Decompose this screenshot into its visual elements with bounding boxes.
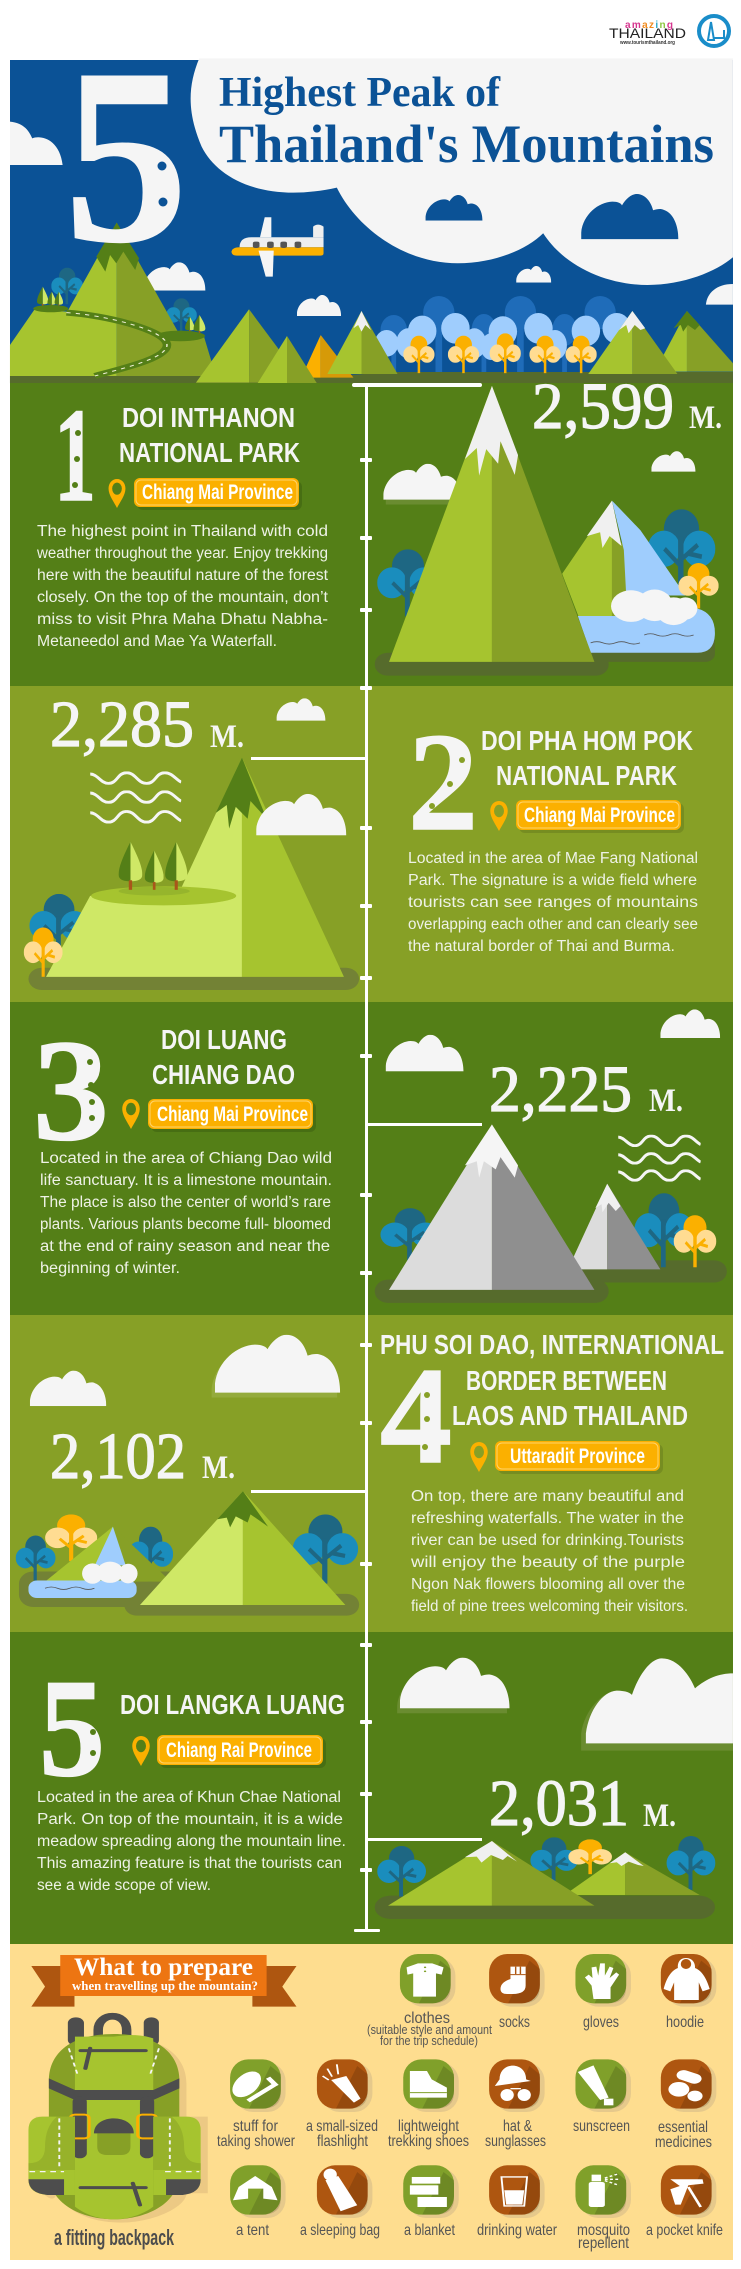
small mountain with waterfall [28,1527,171,1598]
big number 2: 2 [408,705,478,860]
description [36,523,329,650]
item labels: trekking shoes [388,2133,469,2150]
section 1 background [10,383,733,686]
height label: M. [689,400,722,436]
big number 1: 1 [54,381,96,529]
description [408,850,698,955]
ribbon title [72,1954,258,1993]
province pill: Chiang Rai Province [166,1739,312,1762]
item labels: (suitable style and amount [367,2022,492,2037]
ground shadow [375,1896,715,1919]
altitude scale line [251,383,482,1932]
mountains: middle range [196,309,398,383]
item labels: hat & [503,2118,532,2135]
icon: socks [489,1954,545,2007]
title: Thailand's Mountains [219,114,714,174]
trees [377,1836,715,1897]
ribbon title: What to prepare [74,1954,253,1981]
description: overlapping each other and can clearly see [408,916,698,933]
trees [380,1193,716,1267]
small grey mountain [568,1184,660,1269]
item labels [217,2010,723,2252]
province pill: Uttaradit Province [510,1445,645,1468]
trees: orange row [403,333,597,373]
illustration: low mountains [375,1658,733,1919]
wind lines [618,1136,701,1180]
hero illustration [10,58,733,383]
big grey mountain [389,1125,594,1290]
icon: clothes [400,1954,455,2007]
left edge cloud [10,122,63,165]
illustration: mountains with waterfall [375,386,719,676]
heading: NATIONAL PARK [496,760,677,791]
small mountain [565,1852,700,1895]
description: Located in the area of Chiang Dao wild [40,1150,332,1167]
wind lines [90,773,181,822]
description: refreshing waterfalls. The water in the [411,1510,684,1527]
heading [152,1024,295,1090]
section 4 background [10,1315,733,1632]
description: Park. The signature is a wide field where [408,872,697,889]
trees [16,1514,358,1584]
description: tourists can see ranges of mountains [408,894,698,911]
heading: NATIONAL PARK [119,437,300,468]
description: field of pine trees welcoming their visitors. [411,1598,688,1615]
description: beginning of winter. [40,1260,180,1277]
province pill [157,1735,326,1768]
mountain: hero left with road [10,223,216,376]
section 5 background [10,1632,733,1944]
logo: Amazing Thailand [609,20,686,46]
item labels: flashlight [317,2133,368,2150]
description: miss to visit Phra Maha Dhatu Nabha- [37,611,328,628]
small white clouds [144,262,733,316]
item labels: sunscreen [573,2118,630,2135]
height label: M. [643,1798,676,1834]
logo: Amazing Thailand: www.tourismthailand.org [619,40,675,46]
province pill [516,800,684,833]
heading [119,402,300,468]
item labels: socks [499,2014,530,2031]
big number 1 [54,381,96,529]
icon: airplane [232,217,324,277]
description: meadow spreading along the mountain line. [37,1833,346,1850]
item labels: medicines [655,2134,712,2151]
item labels: lightweight [398,2118,459,2135]
item labels: taking shower [217,2133,296,2150]
item labels: for the trip schedule) [380,2033,478,2048]
icon: sleeping bag [317,2165,372,2218]
item labels: a tent [236,2222,269,2239]
panel: section 1 Doi Inthanon [10,370,733,686]
panel: what to prepare [10,1944,733,2260]
logo: Amazing Thailand: THAILAND [609,25,686,41]
description: plants. Various plants become full- bloomed [40,1216,331,1233]
height label: 2,102 [50,1420,186,1493]
icon: trekking shoes [403,2059,459,2112]
description: see a wide scope of view. [37,1877,211,1894]
height label: M. [649,1083,683,1119]
ground shadow [375,633,715,676]
blue clouds [426,194,678,239]
hero sky background [10,60,733,383]
section 2 background [10,686,733,1002]
province pill: Chiang Mai Province [157,1103,308,1126]
big number 4: 4 [380,1339,452,1492]
small mountain and waterfall [562,501,719,653]
icon: medicines [661,2059,716,2112]
height label: M. [210,719,244,755]
description: the natural border of Thai and Burma. [408,938,675,955]
small trees [119,842,187,890]
mountain [46,758,344,977]
heading: DOI PHA HOM POK [481,725,693,756]
panel: section 5 Doi Langka Luang [10,1632,733,1944]
heading [481,725,693,791]
item labels: clothes [404,2010,450,2027]
description: The place is also the center of world’s rare [40,1194,331,1211]
heading: CHIANG DAO [152,1059,295,1090]
description: Ngon Nak flowers blooming all over the [411,1576,685,1593]
clouds [383,451,695,505]
description: will enjoy the beauty of the purple [410,1554,685,1571]
icon: soap and toothbrush [226,2059,286,2112]
heading: DOI LANGKA LUANG [120,1689,345,1720]
height label: 2,031 [489,1767,629,1840]
title: Highest Peak of [219,70,501,116]
description: river can be used for drinking.Tourists [411,1532,684,1549]
description: Park. On top of the mountain, it is a wide [37,1811,343,1828]
main mountain [140,1491,345,1605]
item labels: drinking water [477,2222,558,2239]
ribbon banner [31,1955,297,2007]
description: Located in the area of Mae Fang National [408,850,698,867]
trees [377,509,715,616]
province pill: Chiang Mai Province [142,481,293,504]
panel: section 2 Doi Pha Hom Pok [10,686,733,1002]
icon: sunscreen [575,2059,631,2112]
province pill [495,1441,663,1474]
height label: 2,599 [532,370,674,443]
item labels: a small-sized [306,2118,378,2135]
backpack label: a fitting backpack [54,2225,174,2250]
graphics: ribbon, backpack and tiles [28,1954,716,2223]
description: On top, there are many beautiful and [411,1488,684,1505]
heading: BORDER BETWEEN [466,1365,667,1396]
heading: DOI LUANG [161,1024,287,1055]
preparation background [10,1944,733,2260]
item labels: hoodie [666,2014,704,2031]
province pill [134,478,302,510]
main mountain [389,386,594,662]
description: This amazing feature is that the tourists can [37,1855,342,1872]
icon: hoodie [661,1954,716,2007]
item labels: stuff for [233,2118,279,2135]
section 3 background [10,1002,733,1315]
description [37,1789,346,1894]
item labels: mosquito [577,2222,630,2239]
ground strip [10,372,733,383]
description: The highest point in Thailand with cold [37,523,328,540]
icon: tent [230,2165,286,2218]
description: Located in the area of Khun Chae National [37,1789,341,1806]
icon: location pin [122,1099,140,1129]
big white cloud [191,58,733,285]
illustration: mountain with meadow [24,698,359,990]
item labels: a sleeping bag [300,2222,380,2239]
icon: gloves [575,1954,631,2007]
clouds [30,1335,340,1406]
ground shadow [19,1571,359,1616]
description: here with the beautiful nature of the forest [37,567,329,584]
panel: hero banner [10,18,733,383]
heading: DOI INTHANON [122,402,295,433]
ground shadow [375,1260,727,1303]
ground shadow [28,968,359,990]
item labels: gloves [583,2014,619,2031]
illustration: grey limestone mountains [375,1009,727,1303]
icon: location pin [109,479,125,508]
icon: pocket knife [661,2165,716,2218]
orange tree [24,927,63,977]
icon: flashlight [317,2059,372,2112]
mountains: right range [588,311,733,374]
panel: section 4 Phu Soi Dao [10,1315,733,1632]
item labels: repellent [578,2235,629,2252]
description: at the end of rainy season and near the [40,1238,330,1255]
logo: Amazing Thailand: amazing [625,20,673,31]
description: life sanctuary. It is a limestone mountain. [40,1172,332,1189]
description [410,1488,688,1615]
description [40,1150,332,1277]
icon: location pin [132,1736,150,1766]
big number 3: 3 [33,1011,109,1171]
icon: location pin [470,1442,488,1472]
icon: drinking water [489,2165,545,2218]
heading: LAOS AND THAILAND [452,1400,688,1431]
height label: 2,285 [50,688,194,761]
big number 5: 5 [39,1651,105,1806]
forest [375,296,631,373]
logo: seal [699,16,729,46]
panel: section 3 Doi Luang Chiang Dao [10,1002,733,1315]
height label: M. [202,1450,235,1486]
description: Metaneedol and Mae Ya Waterfall. [37,633,277,650]
clouds [256,698,346,835]
ribbon title: when travelling up the mountain? [72,1978,258,1993]
clouds [386,1009,720,1071]
province pill [148,1099,316,1132]
description: closely. On the top of the mountain, don’t [37,589,329,606]
icon: hat and sunglasses [489,2059,545,2112]
main mountain [388,1841,594,1906]
heading [380,1329,724,1431]
item labels: sunglasses [485,2133,546,2150]
illustration: mountains and waterfall [16,1335,359,1616]
icon: blanket [403,2165,459,2218]
clouds [397,1658,733,1751]
item labels: a blanket [404,2222,455,2239]
icon: mosquito repellent [575,2165,631,2218]
tree [29,894,89,957]
description: weather throughout the year. Enjoy trekking [36,545,328,562]
height label: 2,225 [489,1053,632,1126]
item labels: essential [658,2119,708,2136]
icon: location pin [490,801,508,831]
title [219,70,714,174]
backpack illustration [28,2016,208,2223]
province pill: Chiang Mai Province [524,804,675,827]
big number 5: 5 [64,18,188,295]
